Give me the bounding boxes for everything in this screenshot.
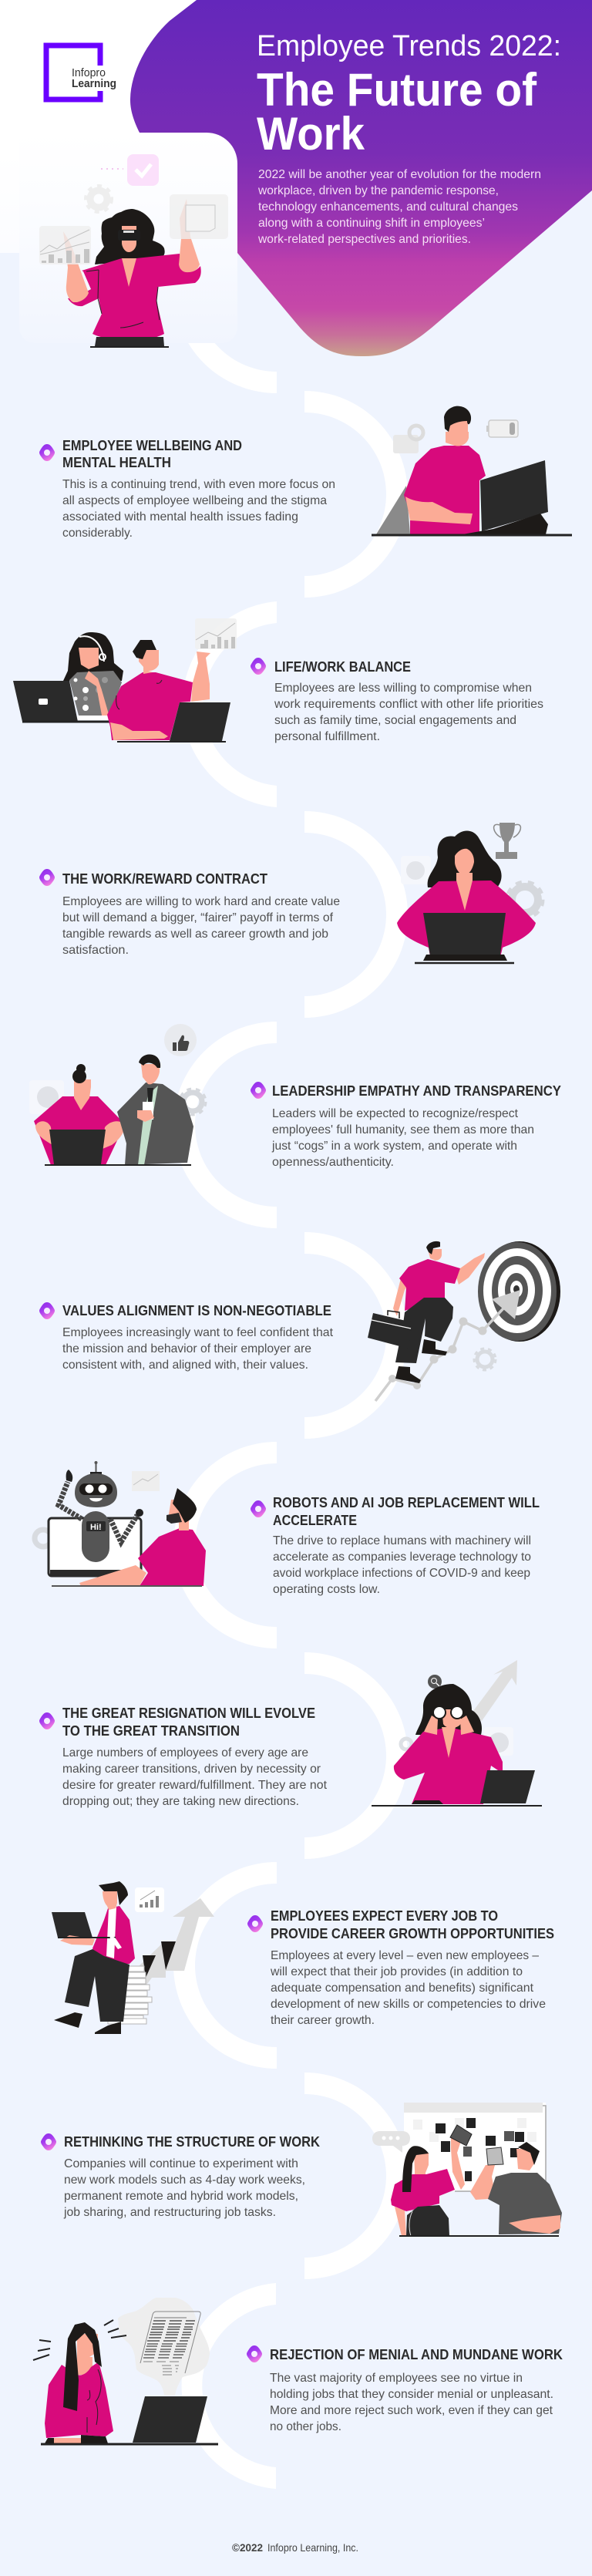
heading: RETHINKING THE STRUCTURE OF WORK bbox=[64, 2134, 320, 2150]
body text: personal fulfillment. bbox=[274, 730, 380, 743]
body text: dropping out; they are taking new directions. bbox=[62, 1795, 299, 1808]
intro paragraph: along with a continuing shift in employees’ bbox=[258, 217, 485, 230]
illustration panel bbox=[19, 133, 237, 343]
body text: Leaders will be expected to recognize/respect bbox=[272, 1107, 519, 1120]
logo: Infopro bbox=[72, 66, 106, 79]
illustration: stressed woman with report bbox=[33, 2298, 218, 2444]
intro paragraph: 2022 will be another year of evolution for the modern bbox=[258, 168, 541, 181]
body text bbox=[62, 478, 335, 540]
body text: The drive to replace humans with machinery will bbox=[273, 1534, 531, 1547]
heading: PROVIDE CAREER GROWTH OPPORTUNITIES bbox=[271, 1926, 554, 1941]
body text: tangible rewards as well as career growth and job bbox=[62, 928, 328, 941]
illustration: woman on book stack with arrow bbox=[52, 1881, 214, 2034]
body text: accelerate as companies leverage technology to bbox=[273, 1551, 531, 1564]
body text: Large numbers of employees of every age are bbox=[62, 1746, 308, 1759]
trend 1 bbox=[39, 438, 335, 540]
body text: but will demand a bigger, “fairer” payoff in terms of bbox=[62, 911, 334, 924]
footer copyright bbox=[232, 2541, 358, 2554]
body text: avoid workplace infections of COVID-9 and keep bbox=[273, 1567, 530, 1580]
illustration: woman with trophy bbox=[397, 823, 543, 963]
body text: More and more reject such work, even if they can get bbox=[270, 2404, 553, 2417]
body text: openness/authenticity. bbox=[272, 1156, 394, 1169]
illustration: robot and man bbox=[35, 1461, 206, 1586]
icon: bullet bbox=[39, 869, 55, 886]
body text: holding jobs that they consider menial or unpleasant. bbox=[270, 2388, 553, 2401]
icon: bullet bbox=[251, 1082, 266, 1099]
illustration: climber and target bbox=[368, 1241, 560, 1401]
icon: bullet bbox=[247, 2345, 262, 2362]
body text: the mission and behavior of their employer are bbox=[62, 1342, 311, 1355]
heading: MENTAL HEALTH bbox=[62, 455, 171, 470]
body text bbox=[63, 2157, 305, 2219]
body text: associated with mental health issues fading bbox=[62, 510, 298, 524]
intro paragraph: technology enhancements, and cultural changes bbox=[258, 200, 518, 214]
icon: bullet bbox=[41, 2133, 56, 2150]
body text: job sharing, and restructuring job tasks. bbox=[63, 2206, 276, 2219]
body text bbox=[274, 682, 543, 743]
body text: just “cogs” in a work system, and operate with bbox=[271, 1140, 517, 1153]
heading bbox=[62, 438, 242, 470]
body text: development of new skills or competencies to drive bbox=[271, 1998, 546, 2011]
body text: consistent with, and aligned with, their values. bbox=[62, 1359, 308, 1372]
trend 7 bbox=[39, 1706, 328, 1808]
header purple blob bbox=[130, 0, 592, 356]
trend 6 bbox=[251, 1495, 540, 1596]
heading: ACCELERATE bbox=[273, 1513, 357, 1528]
trend 8 bbox=[247, 1908, 554, 2027]
body text: will expect that their job provides (in addition to bbox=[270, 1965, 523, 1978]
body text bbox=[273, 1534, 531, 1596]
body text: employees' full humanity, see them as more than bbox=[272, 1123, 534, 1136]
body text: such as family time, social engagements and bbox=[274, 714, 516, 727]
illustration: robot and man: Hi! bbox=[90, 1523, 102, 1532]
body text: Employees at every level – even new employees – bbox=[271, 1949, 539, 1962]
body text: their career growth. bbox=[271, 2014, 375, 2027]
icon: bullet bbox=[39, 444, 55, 461]
body text: satisfaction. bbox=[62, 944, 129, 957]
icon: bullet bbox=[39, 1302, 55, 1319]
body text bbox=[62, 1326, 334, 1372]
body text bbox=[271, 1107, 534, 1169]
body text: considerably. bbox=[62, 527, 133, 540]
trend 5 bbox=[39, 1302, 334, 1372]
icon: bullet bbox=[39, 1712, 55, 1729]
heading bbox=[62, 1706, 315, 1739]
illustration: colleagues at laptops bbox=[13, 618, 237, 742]
body text: Employees increasingly want to feel confident that bbox=[62, 1326, 334, 1339]
trend 9 bbox=[41, 2133, 320, 2219]
title bbox=[257, 30, 561, 160]
footer copyright: ©2022 bbox=[232, 2541, 263, 2554]
heading: VALUES ALIGNMENT IS NON-NEGOTIABLE bbox=[62, 1303, 331, 1318]
illustration: leader and colleague bbox=[29, 1024, 206, 1165]
body text: This is a continuing trend, with even more focus on bbox=[62, 478, 335, 491]
body text: all aspects of employee wellbeing and the stigma bbox=[62, 494, 327, 507]
heading: ROBOTS AND AI JOB REPLACEMENT WILL bbox=[273, 1495, 540, 1510]
body text bbox=[62, 895, 340, 957]
body text: work requirements conflict with other life priorities bbox=[274, 698, 543, 711]
body text bbox=[62, 1746, 328, 1808]
illustration: man at laptop bbox=[372, 406, 572, 535]
intro paragraph: work-related perspectives and priorities. bbox=[257, 233, 471, 246]
body text: Employees are less willing to compromise when bbox=[274, 682, 532, 695]
white top-left background bbox=[0, 0, 247, 253]
timeline arcs bbox=[173, 187, 408, 2489]
trend 2 bbox=[251, 658, 543, 743]
body text: no other jobs. bbox=[270, 2420, 341, 2433]
body text: adequate compensation and benefits) significant bbox=[271, 1982, 534, 1995]
heading bbox=[273, 1495, 540, 1528]
footer copyright: Infopro Learning, Inc. bbox=[267, 2541, 358, 2554]
body text: making career transitions, driven by necessity or bbox=[62, 1763, 321, 1776]
body text: operating costs low. bbox=[273, 1583, 380, 1596]
heading: EMPLOYEES EXPECT EVERY JOB TO bbox=[271, 1908, 498, 1924]
trend 10 bbox=[247, 2345, 563, 2433]
illustration: two people at whiteboard bbox=[372, 2103, 562, 2236]
heading: THE GREAT RESIGNATION WILL EVOLVE bbox=[62, 1706, 315, 1721]
body text: Companies will continue to experiment with bbox=[64, 2157, 298, 2170]
heading: TO THE GREAT TRANSITION bbox=[62, 1723, 240, 1739]
icon: bullet bbox=[251, 1500, 266, 1517]
body text: desire for greater reward/fulfillment. They are not bbox=[62, 1779, 328, 1792]
illustration: woman with VR headset bbox=[39, 154, 228, 347]
illustration: woman with binoculars bbox=[372, 1660, 542, 1806]
trend 4 bbox=[251, 1082, 561, 1169]
heading: REJECTION OF MENIAL AND MUNDANE WORK bbox=[270, 2347, 563, 2362]
icon: bullet bbox=[247, 1915, 263, 1932]
intro paragraph: workplace, driven by the pandemic response, bbox=[257, 184, 499, 197]
icon: bullet bbox=[251, 658, 266, 675]
heading bbox=[271, 1908, 554, 1941]
heading: THE WORK/REWARD CONTRACT bbox=[62, 871, 267, 887]
logo: Learning bbox=[72, 77, 116, 90]
title: Work bbox=[257, 108, 365, 160]
heading: LIFE/WORK BALANCE bbox=[274, 659, 411, 675]
body text: permanent remote and hybrid work models, bbox=[64, 2190, 298, 2203]
body text: The vast majority of employees see no virtue in bbox=[270, 2372, 523, 2385]
title: Employee Trends 2022: bbox=[257, 30, 561, 62]
heading: EMPLOYEE WELLBEING AND bbox=[62, 438, 242, 453]
body text: new work models such as 4-day work weeks, bbox=[64, 2174, 305, 2187]
body text bbox=[270, 1949, 546, 2027]
intro paragraph bbox=[257, 168, 541, 246]
title: The Future of bbox=[257, 64, 537, 116]
trend 3 bbox=[39, 869, 340, 957]
heading: LEADERSHIP EMPATHY AND TRANSPARENCY bbox=[272, 1083, 561, 1099]
body text: Employees are willing to work hard and create value bbox=[62, 895, 340, 908]
body text bbox=[270, 2372, 553, 2433]
logo bbox=[46, 45, 116, 99]
